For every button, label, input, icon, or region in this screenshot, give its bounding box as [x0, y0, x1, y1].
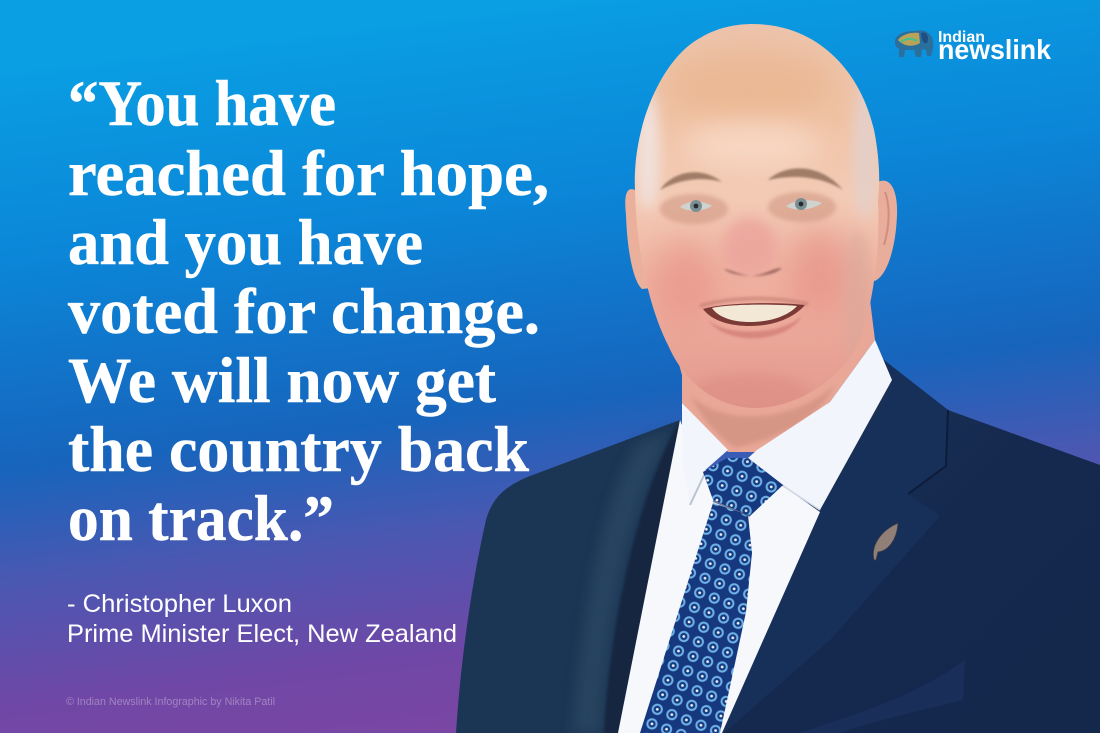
attribution [67, 590, 457, 648]
shirt [618, 420, 820, 733]
quote text [68, 68, 549, 555]
teeth [712, 305, 797, 322]
eye sockets [660, 194, 728, 224]
quote text: We will now get [68, 345, 496, 417]
copyright credit: © Indian Newslink Infographic by Nikita Patil [66, 696, 275, 708]
neck shadow under chin [690, 385, 835, 448]
eyes [680, 202, 712, 211]
attribution: Prime Minister Elect, New Zealand [67, 620, 457, 648]
eyebrows [660, 172, 722, 190]
portrait: Christopher Luxon [456, 24, 1100, 733]
tie [640, 458, 783, 733]
wordmark: newslink [938, 34, 1051, 65]
ears [625, 181, 897, 289]
neck [675, 300, 875, 452]
icon: elephant [895, 30, 933, 57]
wordmark: Indian [938, 29, 985, 46]
collar [682, 340, 892, 510]
face shading and features [636, 50, 877, 417]
jacket [456, 357, 1100, 733]
attribution: - Christopher Luxon [67, 590, 292, 618]
quote text: reached for hope, [68, 138, 549, 210]
quote text: “You have [68, 68, 336, 140]
nose [722, 218, 778, 278]
lower lip [708, 316, 802, 338]
smile line [700, 299, 808, 306]
lapel pin: silver fern [873, 523, 898, 560]
quote text: the country back [68, 414, 530, 486]
quote text: voted for change. [68, 276, 540, 348]
quote text: on track.” [68, 483, 334, 555]
logo: Indian Newslink [895, 29, 1051, 65]
mouth [703, 303, 805, 326]
head [635, 24, 879, 408]
quote text: and you have [68, 207, 423, 279]
